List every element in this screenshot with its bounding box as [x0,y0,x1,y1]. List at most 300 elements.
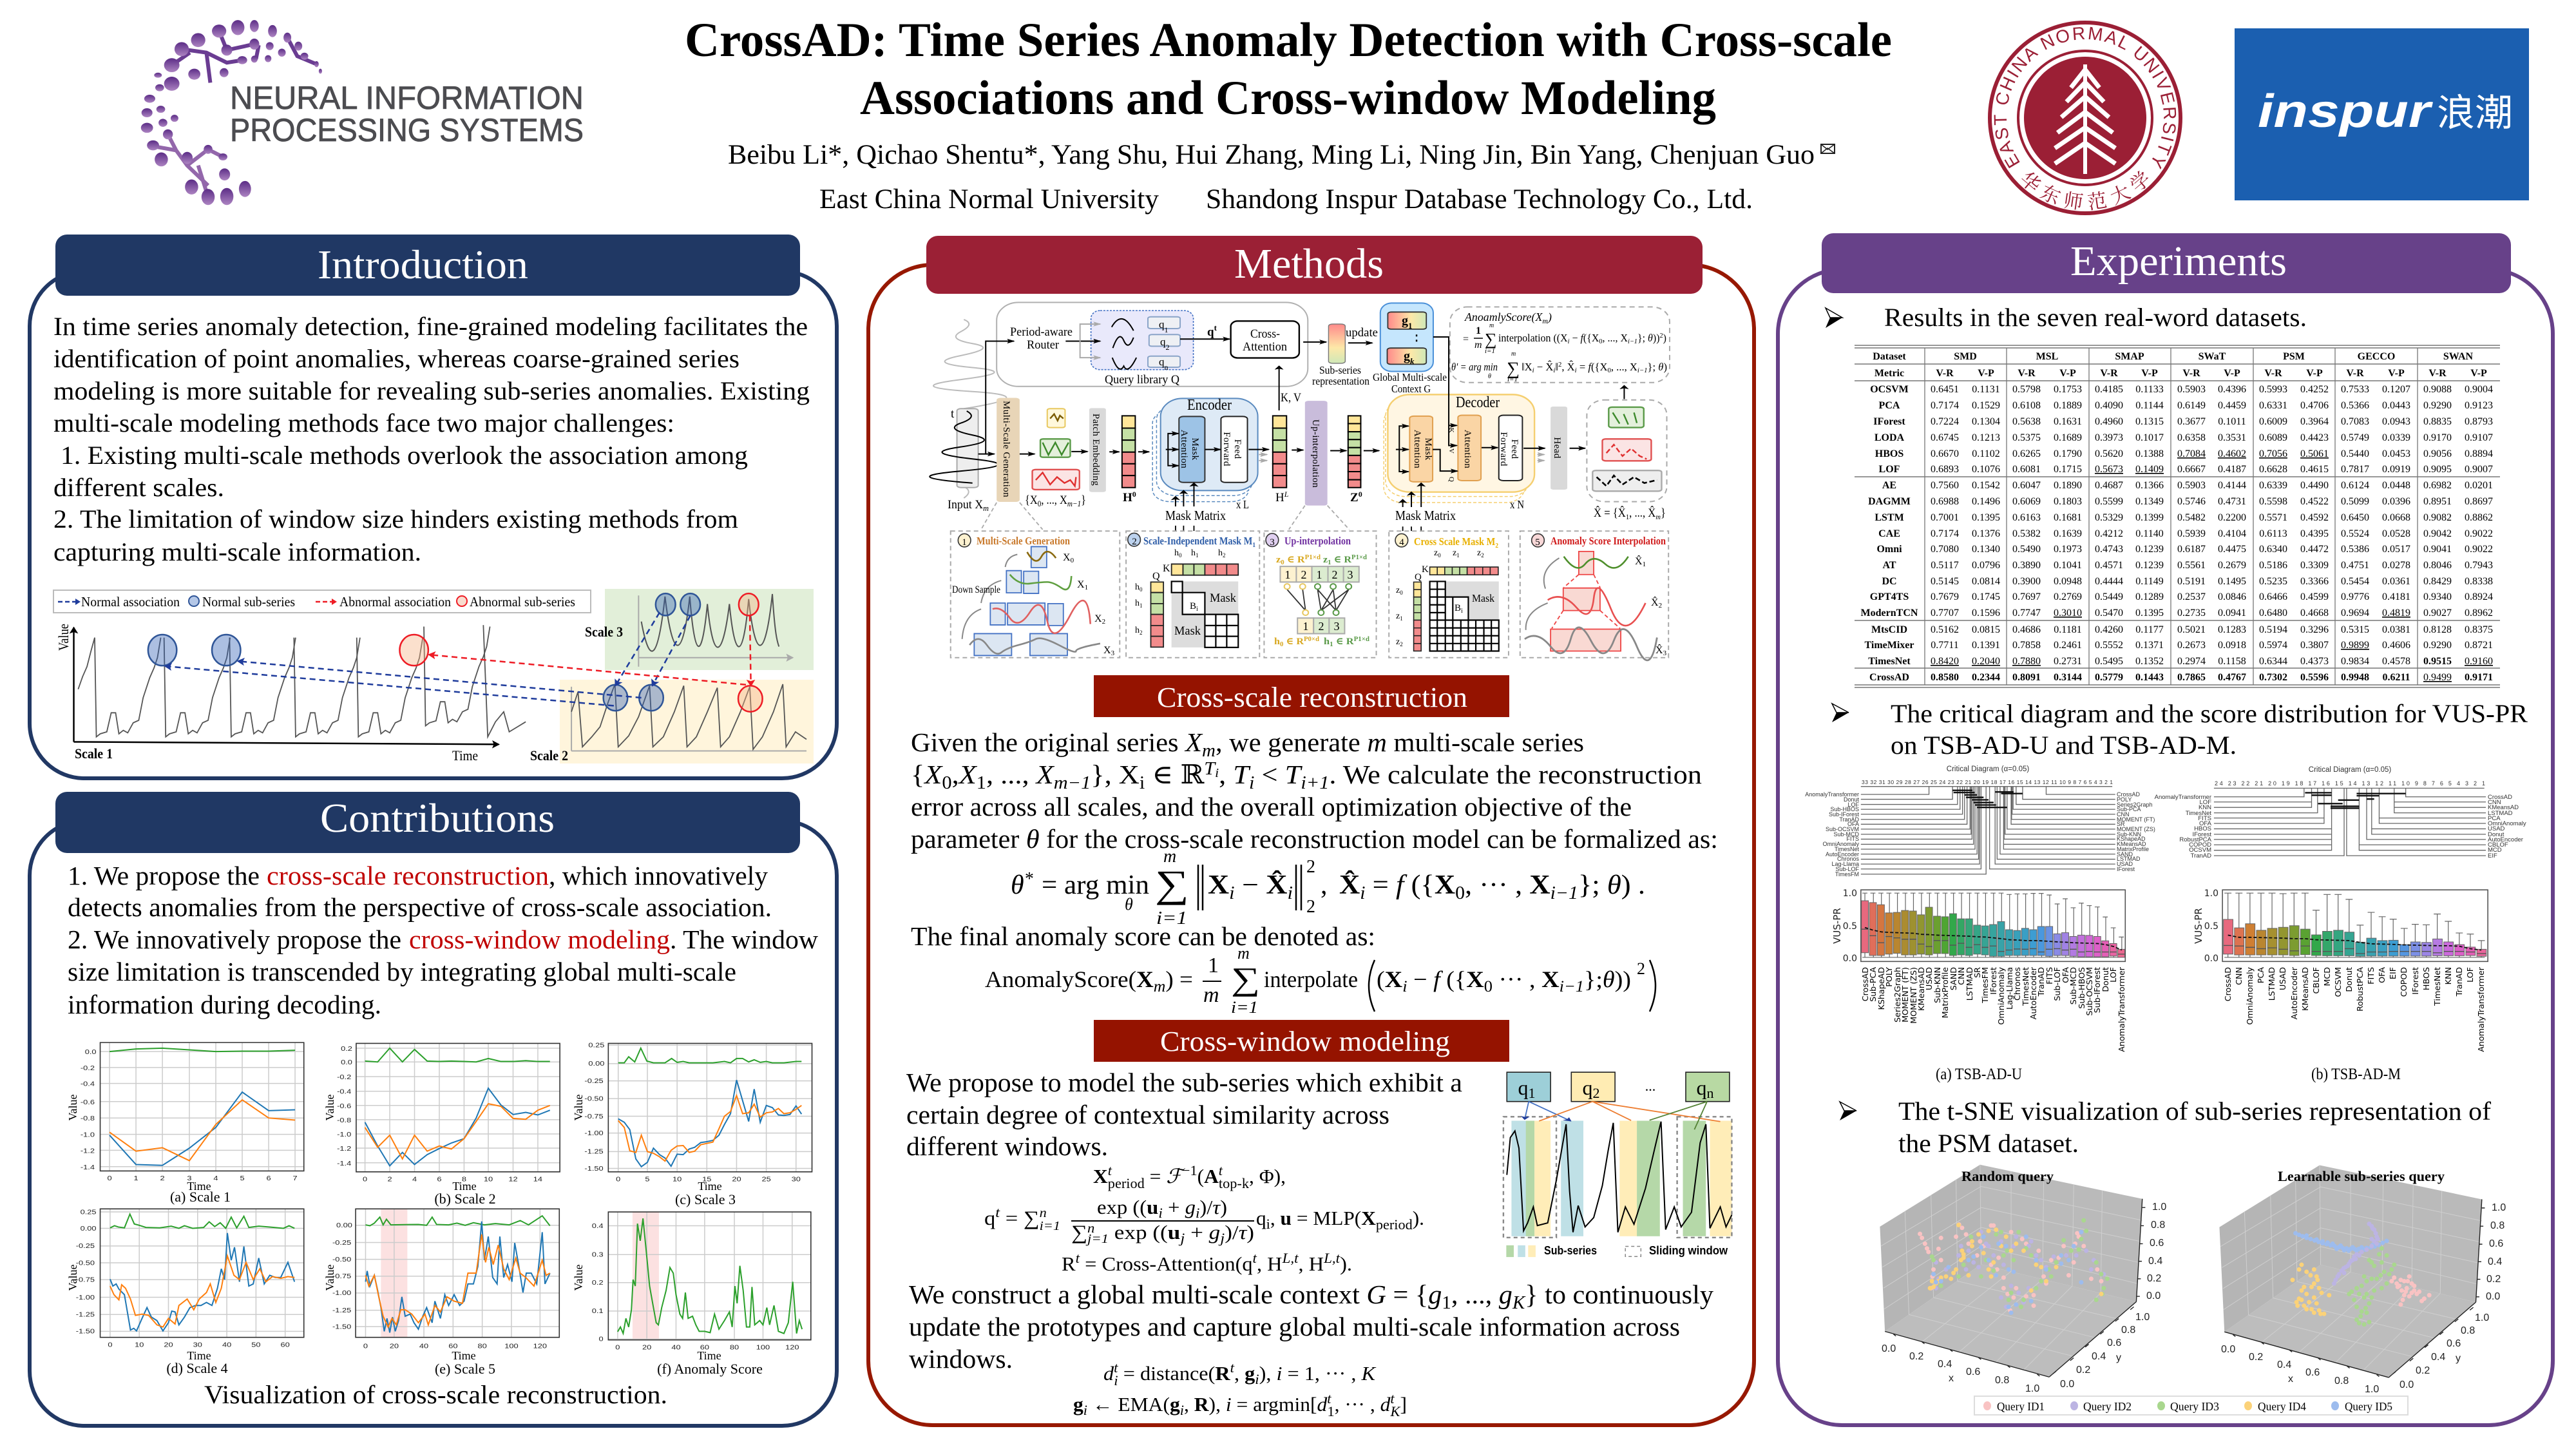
text block: cross-window description [906,1068,1462,1161]
table: results: V-P [2470,368,2487,379]
rotated module labels: Multi-Scale Generation [1001,401,1011,497]
chart: Anomaly Score: 60 [700,1345,709,1351]
text block: introduction: modeling is more suitable for revealing sub-series anomalies. Existing [53,376,810,405]
logo: Inspur: inspur [2258,86,2434,137]
chart: t-SNE random query: 1.0 [2135,1312,2150,1323]
table: results: 0.6451 [1931,384,1959,395]
table: results: 0.3900 [2012,576,2041,587]
table: results: 0.1639 [2054,528,2082,539]
chart: t-SNE random query: x [1949,1373,1954,1384]
chart: VUS-PR box plot TSB-AD-M: Donut [2344,967,2354,992]
equation: optimization objective: θ) . [1607,870,1644,900]
sub-panel labels: 2 [1318,620,1324,633]
table: results: 0.8924 [2465,591,2493,602]
table: results: 0.1376 [1972,528,2000,539]
table: results: 0.4373 [2300,656,2329,667]
equations: query routing: ( [1197,1165,1204,1187]
sub-panel labels: 0 [1438,552,1441,559]
diagram labels: f({X [1588,361,1608,373]
chart: VUS-PR box plot TSB-AD-M: 0.5 [2204,921,2218,932]
table: results: 0.4668 [2300,608,2329,619]
equations: query routing: u [1168,1221,1180,1243]
sub-panel labels: z [1396,586,1400,595]
table: results: 0.8046 [2423,560,2452,571]
text block: cross-scale description: X [958,760,978,789]
equations: query routing: q [984,1207,995,1229]
diagram labels: Z [1350,491,1359,504]
sub-panel labels: 2 [1301,568,1306,581]
table: results: 0.7080 [1931,544,1959,555]
equations: query routing: n [1040,1206,1047,1220]
equation: optimization objective: X̂ [1339,870,1360,900]
chart: critical diagram TSB-AD-U: MOMENT (ZS) [2117,826,2155,832]
table: results: 0.4104 [2218,528,2246,539]
table: results: 0.1011 [2218,416,2246,427]
text block: contributions: cross-scale reconstruction [267,861,549,890]
chart: VUS-PR box plot TSB-AD-U: LOF [2108,967,2118,983]
chart: critical diagram TSB-AD-M: CNN [2488,799,2501,806]
table: results: 0.9004 [2465,384,2493,395]
table: results: 0.7560 [1931,480,1959,491]
table: results: 0.1133 [2135,384,2164,395]
rotated module labels: Mask [1423,438,1433,461]
table: results: GPT4TS [1870,591,1909,602]
chart: Scale 1: 4 [213,1175,218,1182]
diagram labels: n [1165,363,1169,372]
table: results: 0.5673 [2095,464,2123,475]
table: results: 0.8338 [2465,576,2493,587]
chart: t-SNE learnable sub-series query: 0.6 [2447,1338,2461,1349]
title: Associations and Cross-window Modeling [860,72,1716,125]
table: results: 0.8721 [2465,640,2493,651]
chart: critical diagram TSB-AD-U: KShapeAD [2117,836,2146,842]
chart: t-SNE learnable sub-series query: 0.0 [2221,1344,2235,1355]
chart: t-SNE random query: 0.4 [2148,1256,2162,1267]
chart: critical diagram TSB-AD-U: POLY [2117,796,2132,803]
chart: Scale 3 [584,1042,812,1183]
sub-panel labels: ∈ R [1331,555,1351,565]
sub-panel labels: ∈ R [1333,637,1354,647]
equations: query routing: j [1178,1230,1185,1246]
chart: VUS-PR box plot TSB-AD-M: (b) TSB-AD-M [2311,1066,2401,1083]
chart: VUS-PR box plot TSB-AD-U: Sub-PCA [1868,967,1878,1002]
table: results: 0.9007 [2465,464,2493,475]
sub-panel labels: X̂ [1651,597,1659,608]
diagram labels: K, V [1281,391,1301,405]
table: results: SMAP [2115,351,2144,362]
sub-panel labels: 1 [1196,552,1198,559]
bullet: t-SNE: The t-SNE visualization of sub-series representation of [1898,1097,2492,1126]
chart: critical diagram TSB-AD-U: Sub-IForest [1829,811,1859,818]
sub-panel labels: 2 [1481,552,1484,559]
diagram labels: = [1577,361,1588,373]
text block: cross-scale description: i [1140,773,1145,793]
text block: introduction: capturing multi-scale information. [53,537,421,566]
table: results: 0.9041 [2423,544,2452,555]
table: results: 0.1495 [2218,576,2246,587]
diagram labels: X̂ = {X̂ [1594,506,1630,520]
chart: VUS-PR box plot TSB-AD-U: MOMENT (FT) [1900,967,1910,1022]
text block: global context: g [1499,1280,1512,1309]
diagram labels: 1 [1165,325,1169,334]
chart: VUS-PR box plot TSB-AD-M: COPOD [2399,967,2409,997]
equations: query routing: L,t [1282,1250,1299,1266]
chart axis titles and captions: Value [66,1264,79,1291]
chart: Scale 5: 100 [504,1343,519,1350]
chart: VUS-PR box plot TSB-AD-M: KMeansAD [2300,967,2310,1011]
table: results: 0.5021 [2177,624,2206,635]
chart axis titles and captions: Value [572,1264,585,1291]
sub-panel labels: h [1324,637,1329,647]
chart: VUS-PR box plot TSB-AD-U: 0.0 [1843,954,1857,964]
table: results: OCSVM [1870,384,1909,395]
equations: query routing: τ) [1239,1221,1254,1243]
diagram labels: ‖ [1555,361,1558,373]
diagram labels: m [1542,316,1548,325]
sub-panel labels: i [1196,606,1198,613]
table: results: 0.9170 [2423,432,2452,443]
text block: cross-scale description: , ..., [986,760,1036,789]
chart: critical diagram TSB-AD-U: USAD [2117,861,2133,867]
chart: critical diagram TSB-AD-M: OmniAnomaly [2488,820,2526,827]
chart: t-SNE learnable sub-series query: 0.2 [2416,1365,2430,1376]
chart: critical diagram TSB-AD-U: FITS [1846,836,1859,842]
diagram labels: AnoamlyScore(X [1465,311,1543,323]
diagram labels: interpolation ((X [1498,332,1572,344]
heading: Introduction: Introduction [318,242,528,287]
sub-panel labels: X [1094,613,1102,624]
text block: contributions: 1. We propose the [68,861,260,890]
logo: East China Normal University seal: 华东师范大学 [2021,171,2148,210]
bullet: critical diagram: The critical diagram and the score distribution for VUS-PR [1891,699,2528,728]
chart: critical diagram TSB-AD-M: Donut [2488,831,2504,838]
equations: query routing: L,t [1323,1250,1340,1266]
table: results: 0.1131 [1972,384,2000,395]
table: results: 0.3296 [2300,624,2329,635]
table: results: 0.1529 [1972,400,2000,411]
table: results: 0.9694 [2341,608,2369,619]
sub-panel labels: 0 [1281,559,1284,566]
table: results: 0.9123 [2465,400,2493,411]
equations: global context update: , [1234,1362,1245,1385]
table: results: 0.6339 [2259,480,2287,491]
chart axis titles and captions: (a) Scale 1 [170,1189,231,1205]
chart: VUS-PR box plot TSB-AD-U: SAND [1949,967,1958,990]
table: results: 0.4960 [2095,416,2123,427]
table: results: V-R [2182,368,2200,379]
table: results: 0.5099 [2341,496,2369,507]
table: results: 0.9042 [2423,528,2452,539]
text block: cross-scale description: }, X [1091,760,1140,789]
table: results: 0.5620 [2095,448,2123,459]
bullet: critical diagram: on TSB-AD-U and TSB-AD-M. [1891,731,2237,760]
text block: cross-scale description: Given the original series X [911,727,1201,757]
table: results: 0.1017 [2135,432,2164,443]
sub-panel labels: K [1163,563,1170,574]
diagram: multi-scale association: Value [55,624,72,651]
table: results: 0.5974 [2259,640,2287,651]
chart: VUS-PR box plot TSB-AD-U: TimesFM [1980,967,1990,1004]
table: results: 0.4459 [2218,400,2246,411]
table: results: 0.1213 [1972,432,2000,443]
sub-panel labels: h [1218,548,1223,558]
chart: critical diagram TSB-AD-U: TimesNet [1835,846,1859,852]
equation: anomaly score: (X [1377,966,1402,992]
table: results: 0.0448 [2382,480,2410,491]
table: results: TimesNet [1868,656,1911,667]
table: results: 0.6667 [2177,464,2206,475]
chart: Scale 1: -1.0 [81,1132,95,1138]
table: results: Dataset [1873,351,1906,362]
chart: critical diagram TSB-AD-M: EIF [2488,852,2497,859]
table: results: 0.8429 [2423,576,2452,587]
table: results: AE [1882,480,1896,491]
chart: VUS-PR box plot TSB-AD-U: Lag-Llama [2005,967,2014,1010]
table: results: 0.1890 [2054,480,2082,491]
chart: t-SNE random query: Random query [1961,1168,2054,1184]
chart: critical diagram TSB-AD-U: TimesFM [1835,871,1859,878]
chart: Scale 1: 3 [187,1175,192,1182]
table: results: V-P [2059,368,2076,379]
chart: Scale 1: 6 [266,1175,271,1182]
equations: query routing: , H [1299,1252,1324,1275]
bullet: t-SNE [1840,1097,2492,1158]
equations: global context update: K [1390,1403,1401,1419]
table: results: 0.8375 [2465,624,2493,635]
chart: t-SNE learnable sub-series query: x [2288,1374,2293,1385]
legend: query IDs: Query ID4 [2258,1400,2306,1413]
chart: VUS-PR box plot TSB-AD-U: Chronos [2012,967,2022,1001]
diagram labels: , ..., X [1603,332,1628,344]
chart: Anomaly Score: 0 [615,1345,620,1351]
table: results: 0.2735 [2177,608,2206,619]
equation: anomaly score: ∑ [1231,961,1260,997]
chart: VUS-PR box plot TSB-AD-U: SR [1972,967,1982,978]
text block: global context: We construct a global multi-scale context G = {g [909,1280,1442,1309]
chart: Scale 5: 120 [533,1343,547,1350]
table: results: 0.6340 [2259,544,2287,555]
diagram: CrossAD architecture [930,302,1670,660]
chart: critical diagram TSB-AD-U: Series2Graph [2117,801,2153,808]
logo: Neural Information Processing Systems [141,20,584,205]
diagram: sub-series across windows: Sub-series [1544,1244,1597,1257]
diagram labels: t [1214,323,1217,332]
table: results: 0.5366 [2341,400,2369,411]
text block: cross-window description: We propose to model the sub-series which exhibit a [906,1068,1462,1097]
bullet: results: Results in the seven real-word datasets. [1884,303,2307,332]
rotated module labels [1001,401,1562,497]
chart: Scale 1: 0 [107,1175,112,1182]
rotated module labels: Attention [1462,430,1473,468]
sub-panel labels: P1×d [1354,636,1369,643]
equation: optimization objective: 0 [1455,883,1465,903]
table: results: 0.0815 [1972,624,2000,635]
chart: VUS-PR box plot TSB-AD-M: FITS [2366,967,2376,984]
sub-panel titles: 2 [1495,542,1498,550]
text block: introduction: In time series anomaly detection, fine-grained modeling facilitates the [53,312,808,341]
equation: optimization objective: * [1024,869,1033,889]
chart: t-SNE learnable sub-series query: 0.2 [2249,1352,2263,1363]
equations: query routing: ). [1340,1252,1352,1275]
text block: contributions [68,861,818,1019]
legend: query IDs: Query ID1 [1997,1400,2045,1413]
equations: query routing: τ) [1212,1196,1226,1218]
equation: anomaly score [985,944,1655,1017]
chart axis titles and captions: Time [452,1349,476,1362]
chart: Scale 5: 60 [448,1343,457,1350]
table: results: 0.9499 [2423,672,2452,683]
chart: Scale 4: -1.25 [76,1312,95,1318]
equations: query routing: )/ [1199,1196,1213,1218]
chart: VUS-PR box plot TSB-AD-U: Series2Graph [1893,967,1902,1022]
diagram labels: θ' = arg min [1451,361,1498,373]
equations: global context update: i [1083,1402,1087,1418]
table: results: 0.9082 [2423,512,2452,523]
equations: query routing: ∑ [1071,1221,1085,1243]
diagram labels: ∑ [1507,359,1520,379]
table: results: PSM [2283,351,2305,362]
table: results: 0.1395 [2135,608,2164,619]
chart: Anomaly Score: 100 [756,1345,770,1351]
equations: query routing: = ∑ [1000,1207,1040,1229]
chart axis titles and captions: Value [323,1264,336,1291]
chart: Scale 1: -1.4 [81,1164,95,1171]
diagram labels: 0 [1607,367,1611,374]
sub-panel labels: X̂ [1655,645,1663,656]
table: results: 0.9095 [2423,464,2452,475]
table: results: 0.6331 [2259,400,2287,411]
chart: critical diagram TSB-AD-U: Chronos [1837,856,1859,862]
diagram labels: , X̂ [1561,361,1575,373]
table: results: 0.1041 [2054,560,2082,571]
table: results: 0.1181 [2054,624,2082,635]
chart: Scale 4: 0.00 [81,1225,97,1232]
table: results: 0.8580 [1931,672,1959,683]
text block: global context: 1 [1442,1293,1451,1313]
chart: t-SNE random query: 0.6 [2150,1238,2164,1249]
chart: critical diagram TSB-AD-U: LSTMAD [2117,856,2141,862]
heading: Experiments [1822,233,2511,293]
affiliations: Shandong Inspur Database Technology Co., Ltd. [1206,184,1753,215]
chart: t-SNE learnable sub-series query: 0.8 [2334,1376,2349,1387]
table: results: 0.4615 [2300,464,2329,475]
table: results: 0.6466 [2259,591,2287,602]
table: results: 0.8697 [2465,496,2493,507]
table: results: 0.1973 [2054,544,2082,555]
chart: t-SNE learnable sub-series query: 0.4 [2431,1352,2445,1363]
chart axis titles and captions: Value [572,1094,585,1120]
equations: query routing: t [1253,1250,1257,1266]
diagram: multi-scale association: Scale 2 [530,747,568,763]
equations: query routing: exp (( [1109,1221,1168,1243]
table: results: 0.1596 [1972,608,2000,619]
equation: optimization objective: f ({X [1396,870,1454,900]
chart: VUS-PR box plot TSB-AD-M: HBOS [2421,967,2431,990]
chart: t-SNE random query: 0.0 [2146,1291,2161,1301]
table: results: 0.7943 [2465,560,2493,571]
equation: optimization objective: = [1366,870,1396,900]
table: results: LSTM [1875,512,1904,523]
chart: VUS-PR box plot TSB-AD-U: VUS-PR [1831,908,1843,944]
diagram labels: H [1275,491,1284,504]
diagram: sub-series across windows: Sliding window [1649,1244,1728,1257]
rotated module labels: Patch Embedding [1091,414,1101,486]
table: results: 0.2731 [2054,656,2082,667]
chart: VUS-PR box plot TSB-AD-M: CNN [2234,967,2244,985]
rotated module labels: Feed [1232,439,1243,459]
text block: cross-scale description: i+1 [1301,773,1329,793]
table: results: CrossAD [1869,672,1909,683]
diagram labels: Sub-series [1319,364,1361,376]
table: results: 0.2344 [1972,672,2000,683]
table: results: LOF [1879,464,1900,475]
table: results: 0.5779 [2095,672,2123,683]
chart: Anomaly Score: 0.1 [592,1308,604,1315]
chart: VUS-PR box plot TSB-AD-U: MOMENT (ZS) [1909,967,1918,1024]
chart: critical diagram TSB-AD-U: OmniAnomaly [1822,841,1859,847]
table: results: 0.0361 [2382,576,2410,587]
sub-panel labels: 0 [1179,552,1182,559]
diagram labels: Context G [1391,383,1431,395]
equation: anomaly score: ) = [1165,966,1193,992]
table: results: 0.0381 [2382,624,2410,635]
chart: critical diagram TSB-AD-U: KMeansAD [2117,841,2146,847]
table: results: 0.1144 [2135,400,2164,411]
equation: optimization objective: θ [1011,870,1024,900]
chart: critical diagram TSB-AD-U: AnomalyTransformer [1805,791,1859,798]
diagram labels: q [1159,356,1165,368]
equations: query routing: period [1108,1175,1145,1191]
table: results: 0.8894 [2465,448,2493,459]
chart: Scale 2: -0.8 [337,1117,351,1124]
chart: Scale 3: -1.50 [584,1166,604,1172]
sub-panel labels: 2 [1332,568,1337,581]
table: results: 0.4212 [2095,528,2123,539]
chart: t-SNE random query: 1.0 [2025,1383,2039,1394]
table: results: 0.4144 [2218,480,2246,491]
chart: Scale 2: 2 [387,1176,392,1183]
equation: optimization objective: X [1529,870,1550,900]
table: results: MSL [2036,351,2058,362]
chart: Scale 4: 0 [108,1342,112,1348]
table: results: SMD [1954,351,1977,362]
table: results: 0.9290 [2423,640,2452,651]
sub-panel labels: z [1323,555,1328,565]
table: results: 0.5638 [2012,416,2041,427]
panel: Introduction [30,235,837,778]
diagram labels: − X̂ [1534,361,1553,373]
sub-panel labels: Mask [1472,592,1494,604]
rotated module labels: Up-interpolation [1310,419,1321,488]
chart: VUS-PR box plot TSB-AD-U: AutoEncoder [2028,966,2038,1019]
table: results: 0.1158 [2218,656,2246,667]
diagram labels: 2 [1558,361,1561,369]
chart axis titles and captions: Value [66,1094,79,1120]
chart: Scale 4: -1.50 [76,1329,95,1335]
equations: global context update: i [1114,1372,1118,1388]
chart: Scale 1: 2 [160,1175,165,1182]
text block: cross-scale description: parameter θ for the cross-scale reconstruction model can be formalized as: [911,824,1718,854]
table: results: 0.7711 [1931,640,1959,651]
table: results: 0.6450 [2341,512,2369,523]
equations: query routing: u = MLP(X [1281,1207,1376,1229]
diagram: sub-series across windows: q [1518,1076,1528,1099]
chart: VUS-PR box plot TSB-AD-M: OCSVM [2333,967,2343,997]
subheading: Cross-window modeling: Cross-window modeling [1160,1026,1450,1057]
equation: anomaly score: i [1402,978,1407,995]
equations: query routing: + [1185,1221,1209,1243]
logo: East China Normal University seal: EAST CHINA NORMAL UNIVERSITY [1994,27,2176,169]
